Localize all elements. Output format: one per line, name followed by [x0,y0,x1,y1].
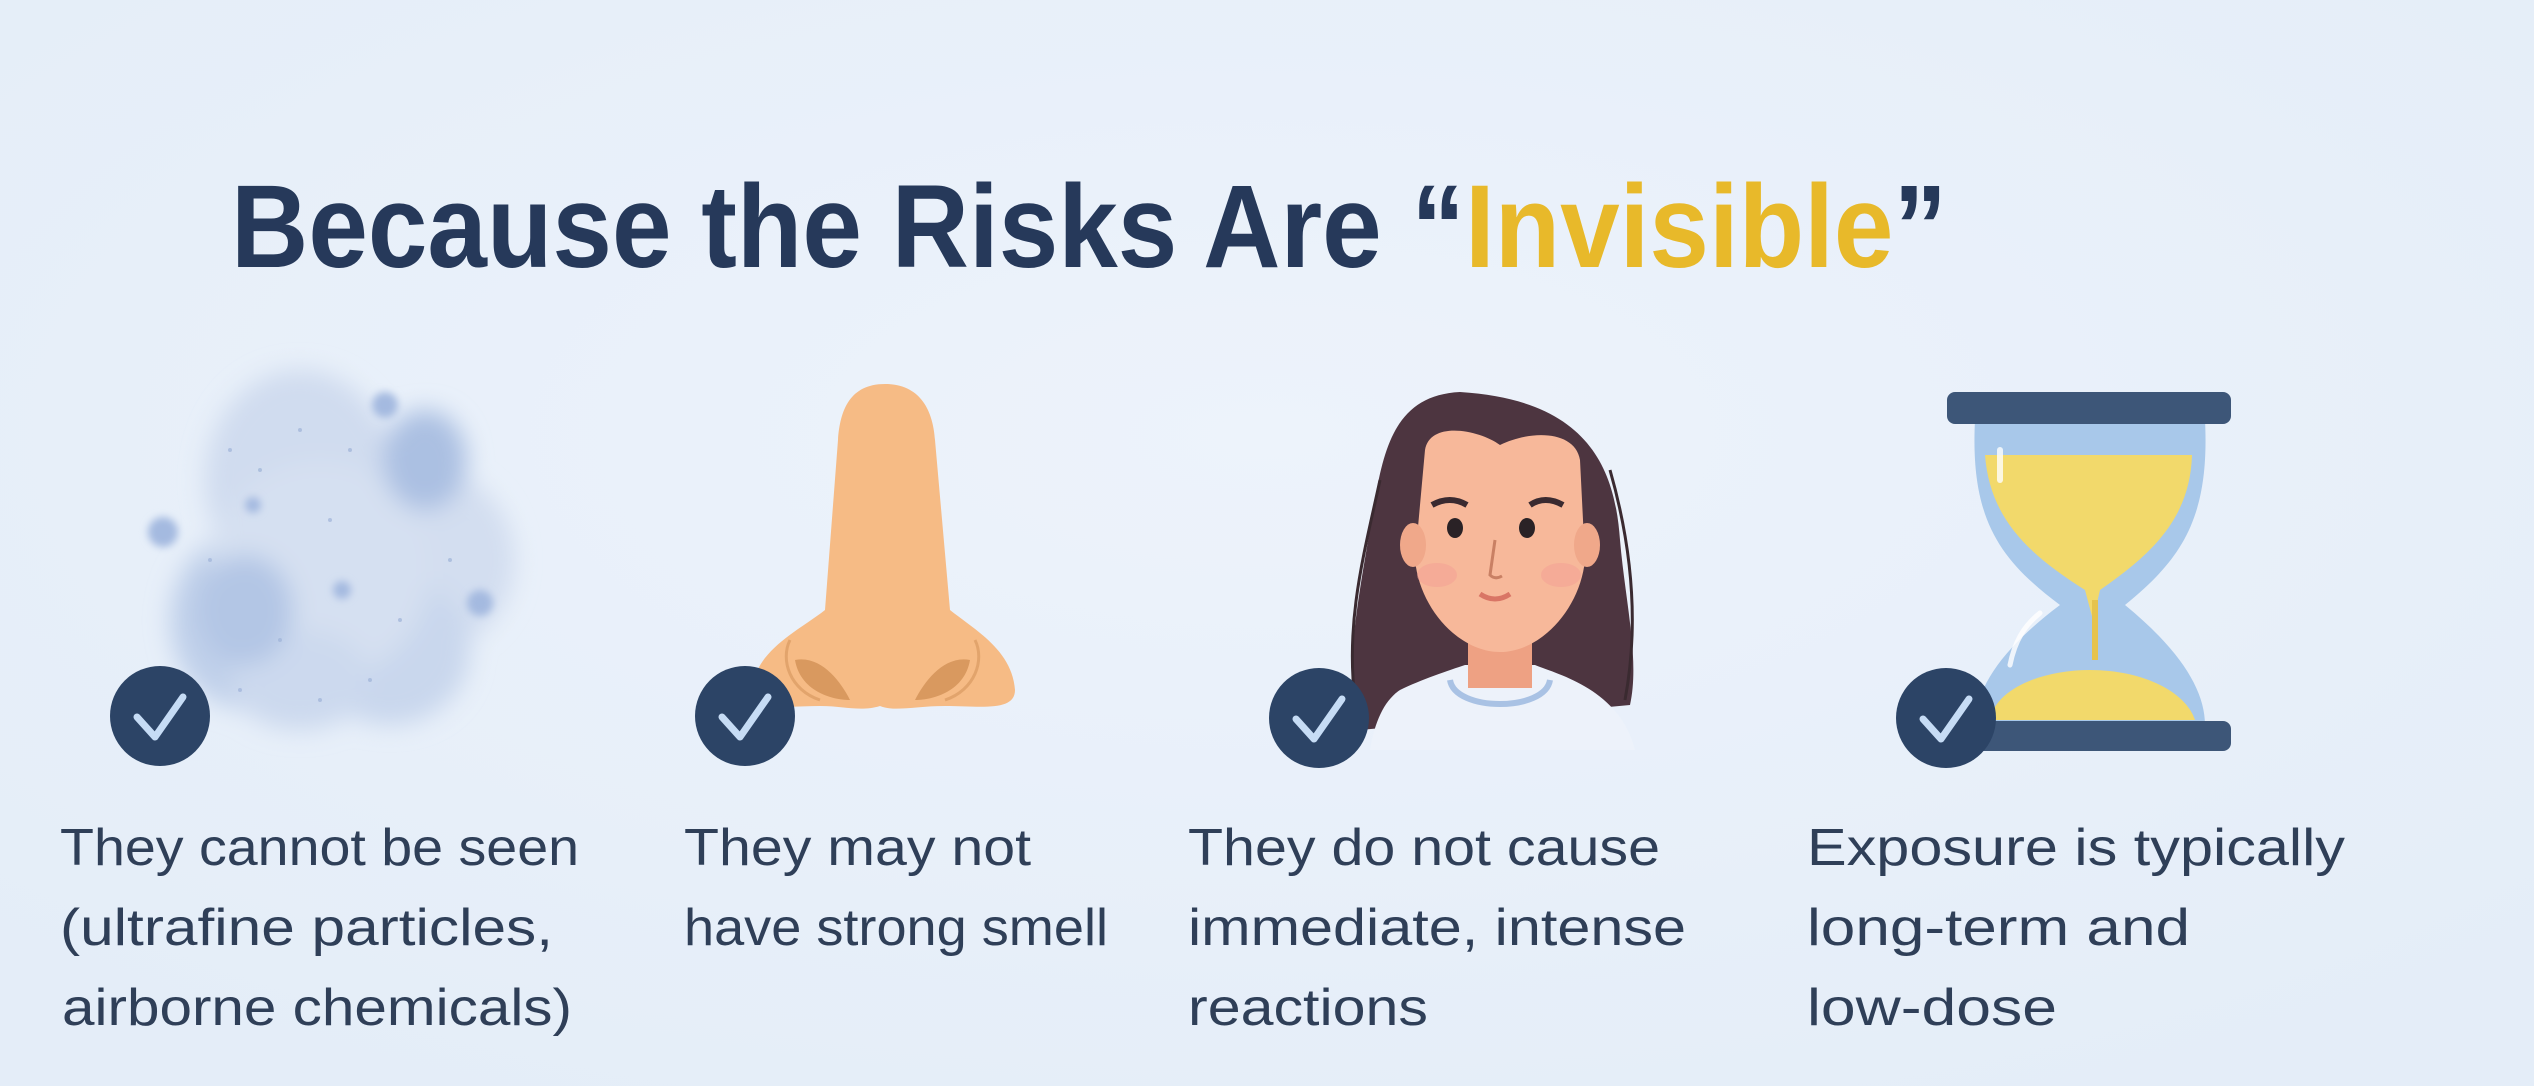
text: column 3: reactions [1188,979,1428,1037]
icon: check 4 [1896,668,1996,768]
text: column 3: They do not cause [1188,819,1660,877]
title: Because the Risks Are “Invisible” [231,161,1947,293]
text: column 1: They cannot be seen [60,819,579,877]
icon: hourglass [1947,392,2231,751]
text: column 2 [684,819,1108,957]
text: column 4: Exposure is typically [1807,819,2345,877]
text: column 2: have strong smell [684,899,1108,957]
icon: nose [752,384,1015,709]
text: column 4 [1807,819,2345,1037]
text: column 1 [60,819,579,1037]
icon: check 2 [695,666,795,766]
icon: woman [1352,392,1635,750]
text: column 2: They may not [684,819,1032,877]
text: column 3: immediate, intense [1188,899,1686,957]
icon: particle cloud [148,370,515,730]
text: column 3 [1188,819,1686,1037]
text: column 1: (ultrafine particles, [60,899,553,957]
text: column 4: long-term and [1807,899,2190,957]
text: column 1: airborne chemicals) [62,979,572,1037]
text: column 4: low-dose [1807,979,2057,1037]
icon: check 3 [1269,668,1369,768]
icon: check 1 [110,666,210,766]
